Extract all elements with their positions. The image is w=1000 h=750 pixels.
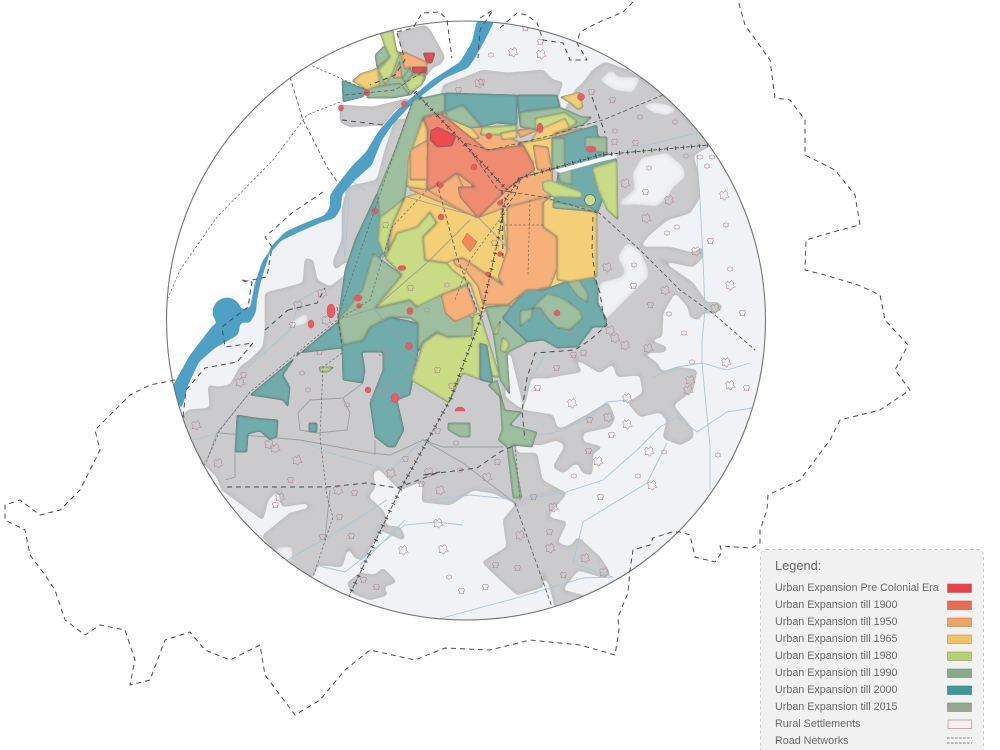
1990 south-east blobs xyxy=(520,293,583,330)
1990 south-east strip xyxy=(488,380,537,498)
pre-colonial core xyxy=(430,127,456,147)
legend row: road networks xyxy=(775,735,972,747)
north lime strip xyxy=(480,125,517,135)
legend row: 1900: Urban Expansion till 1900 xyxy=(775,599,898,611)
legend row: rural settlements xyxy=(775,718,972,730)
north-west cluster: green core xyxy=(402,67,413,83)
urban backing: central yellow xyxy=(385,208,598,313)
1950 west side xyxy=(410,140,427,180)
legend panel xyxy=(760,550,984,750)
land base xyxy=(160,15,772,627)
north-west cluster: lime xyxy=(378,30,400,85)
north-west cluster: green base xyxy=(367,83,410,98)
rural land: south-west small chunks xyxy=(347,525,405,600)
1965 central zone xyxy=(387,190,508,283)
urban interior lines xyxy=(338,197,510,400)
north teal block xyxy=(445,93,517,127)
legend row: 1950: Urban Expansion till 1950 xyxy=(775,616,898,628)
legend row: 1990: Urban Expansion till 1990 xyxy=(775,667,898,679)
north-east lime xyxy=(535,112,578,133)
rural land: east xyxy=(510,62,723,445)
1950 south-centre xyxy=(427,173,478,218)
1990 central zone xyxy=(338,253,473,353)
1965 east zone xyxy=(543,197,597,282)
1990 patch below centre xyxy=(485,305,527,395)
urban backing: north-west cluster xyxy=(374,52,426,96)
legend row: 2000: Urban Expansion till 2000 xyxy=(775,684,898,696)
east green base xyxy=(553,202,598,212)
legend row: 2015: Urban Expansion till 2015 xyxy=(775,701,898,713)
1980 central-west lobe xyxy=(375,212,470,308)
legend row: rural settlements: Rural Settlements xyxy=(775,718,860,730)
disc outline xyxy=(166,21,766,620)
1900 core zone xyxy=(423,113,535,218)
1980 west lobe overlay xyxy=(378,197,405,258)
east lime lobes xyxy=(542,180,582,198)
north-west cluster: lime lower xyxy=(405,75,425,93)
north-west cluster: red blocks xyxy=(423,53,435,63)
urban expansion zones xyxy=(250,30,618,498)
north-west cluster: green upper xyxy=(375,45,390,68)
legend row: 1965 xyxy=(775,633,972,645)
legend row: 2015 xyxy=(775,701,972,713)
2015 edge strip and 1990 north-west strip xyxy=(376,92,445,220)
cleared land pockets xyxy=(275,70,685,562)
north-east yellow strip xyxy=(530,118,570,142)
legend row: 1990 xyxy=(775,667,972,679)
north yellow and orange strips xyxy=(500,130,517,140)
legend row: 1965: Urban Expansion till 1965 xyxy=(775,633,898,645)
2000 sliver xyxy=(480,343,493,383)
railways xyxy=(348,92,708,598)
2000 south-east zone xyxy=(502,275,607,348)
rural land layer xyxy=(170,25,723,612)
urban backing: orange around the core xyxy=(408,112,553,218)
area north-west of the river xyxy=(167,22,476,383)
streams and minor roads xyxy=(193,133,752,618)
north-east corner yellow xyxy=(560,92,583,110)
rural land: west and south xyxy=(170,100,615,577)
legend row: road networks: Road Networks xyxy=(775,735,848,747)
1990 isolated patches xyxy=(235,367,470,452)
settlement seats xyxy=(308,90,596,411)
road networks inside disc xyxy=(152,33,755,607)
legend row: 1980: Urban Expansion till 1980 xyxy=(775,650,898,662)
north-west cluster: teal xyxy=(342,80,367,102)
east green patch xyxy=(585,137,607,153)
map disc xyxy=(168,22,765,620)
legend row: 1980 xyxy=(775,650,972,662)
legend row: 2000 xyxy=(775,684,972,696)
legend row: 1950 xyxy=(775,616,972,628)
1980 small leaves xyxy=(493,320,501,335)
east green columns xyxy=(552,138,565,170)
white streak xyxy=(553,153,617,173)
north-east orange strip xyxy=(555,128,583,138)
rural land: north band and north pockets xyxy=(340,25,563,127)
north green wedge xyxy=(445,105,482,128)
rural land: south chunk xyxy=(482,490,610,612)
east teal block xyxy=(552,125,617,212)
1980 south zone xyxy=(411,313,500,403)
1950 square block xyxy=(441,285,477,322)
1965 north-west rim xyxy=(407,118,427,190)
east lime block xyxy=(592,160,618,220)
north-west cluster: yellow xyxy=(352,67,380,90)
2000 west zone xyxy=(250,193,418,447)
north-west cluster: orange xyxy=(393,60,402,78)
river xyxy=(173,20,495,412)
legend row: 1900 xyxy=(775,599,972,611)
north-east green block xyxy=(520,107,592,133)
rural settlements xyxy=(192,25,750,594)
north-east teal block xyxy=(517,95,560,127)
1965 north rim xyxy=(440,113,480,140)
1950 small bay xyxy=(533,145,552,170)
legend row: pre colonial: Urban Expansion Pre Colonial Era xyxy=(775,582,939,594)
north-west cluster: yellow-orange xyxy=(400,52,427,75)
legend title: Legend: xyxy=(775,558,821,573)
1950 central-east zone xyxy=(453,195,557,305)
1965 north-east of centre xyxy=(515,135,553,178)
